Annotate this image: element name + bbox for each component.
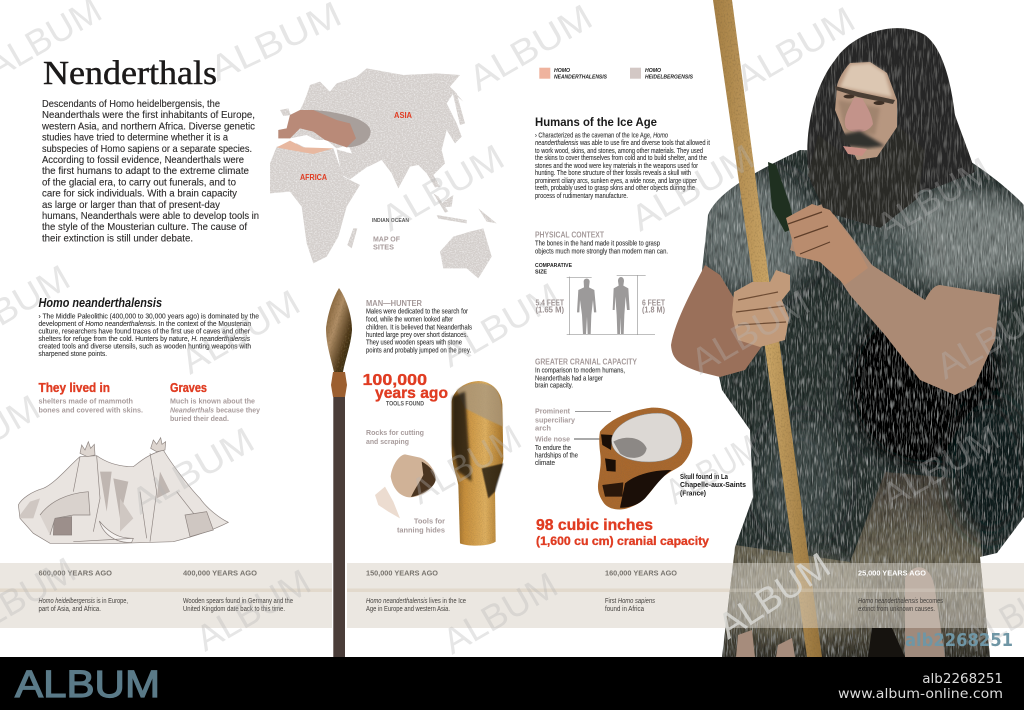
skull callout labels: climate bbox=[535, 460, 555, 467]
watermarks: ALBUM bbox=[868, 149, 997, 247]
size comparison chart: SIZE bbox=[535, 270, 547, 276]
watermarks: ALBUM bbox=[124, 419, 261, 522]
size comparison chart: (1.65 M) bbox=[536, 306, 564, 314]
watermarks: ALBUM bbox=[462, 0, 599, 99]
callout: graves: Neanderthals because they bbox=[170, 406, 261, 414]
timeline: 150,000 years ago: Homo neanderthalensis lives in the Ice bbox=[366, 598, 466, 605]
text: Middle Paleolithic: › The Middle Paleolithic (400,000 to 30,000 years ago) is dominated by the bbox=[38, 314, 259, 320]
skull callout labels: Wide nose bbox=[535, 434, 570, 444]
legend: HOMO bbox=[645, 68, 662, 74]
watermarks: ALBUM bbox=[174, 281, 307, 382]
watermarks: ALBUM bbox=[404, 416, 528, 512]
face bbox=[835, 62, 897, 160]
text: man hunter: Males were dedicated to the search for bbox=[366, 308, 469, 316]
figure: Neanderthal man with spear bbox=[671, 0, 1024, 660]
text: Middle Paleolithic bbox=[38, 314, 259, 358]
text: greater cranial capacity: GREATER CRANIAL CAPACITY bbox=[535, 358, 638, 366]
text: ice age bbox=[535, 132, 710, 200]
timeline: 25,000 years ago: extinct from unknown causes. bbox=[858, 606, 935, 613]
skull caption bbox=[680, 474, 746, 498]
watermarks: ALBUM bbox=[624, 136, 761, 239]
label: tanning tools bbox=[397, 516, 445, 534]
intro text block: humans, Neanderthals were able to develop tools in bbox=[42, 211, 259, 222]
watermarks: ALBUM bbox=[434, 274, 567, 375]
text: greater cranial capacity: brain capacity. bbox=[535, 382, 573, 390]
fur cape and skirt bbox=[695, 145, 1024, 660]
text: ice age: process of rudimentary manufacture. bbox=[535, 193, 628, 200]
skull callout labels: hardships of the bbox=[535, 452, 578, 460]
heading: humans of the ice age: Humans of the Ice Age bbox=[535, 115, 657, 129]
illustration: mammoth bone shelter bbox=[18, 438, 228, 543]
skull callout labels: superciliary bbox=[535, 416, 576, 424]
watermarks: ALBUM bbox=[684, 281, 817, 382]
text: ice age: stones and the wood were key materials in the weapons used for bbox=[535, 163, 699, 170]
timeline: 25,000 years ago: 25,000 YEARS AGO bbox=[858, 568, 926, 578]
intro text block: of the glacial era, to carry out funerals, and to bbox=[42, 177, 236, 188]
hair bbox=[807, 28, 975, 190]
watermarks: ALBUM bbox=[658, 426, 766, 512]
footer logo: ALBUM bbox=[15, 664, 160, 706]
brain cast bbox=[612, 413, 682, 462]
text: physical context: The bones in the hand made it possible to grasp bbox=[535, 240, 660, 248]
timeline: 150,000 years ago: Age in Europe and western Asia. bbox=[366, 606, 450, 613]
figure: neanderthal bbox=[577, 279, 596, 334]
legs bbox=[736, 567, 945, 657]
intro text block: care for sick individuals. With a brain capacity bbox=[42, 189, 238, 200]
stone rock tool bbox=[375, 454, 436, 518]
callout: 100,000 years ago: 100,000 bbox=[362, 372, 427, 389]
continents bbox=[270, 68, 497, 278]
right arm bbox=[790, 203, 1000, 395]
intro text block: Neanderthals were the first inhabitants of Europe, bbox=[42, 110, 255, 121]
text: man hunter: food, while the women looked after bbox=[366, 316, 454, 324]
label: tanning tools: tanning hides bbox=[397, 526, 445, 534]
timeline: 160,000 years ago: First Homo sapiens bbox=[605, 598, 655, 605]
text: Middle Paleolithic: culture, researchers have found traces of the first use of caves and other bbox=[38, 328, 251, 336]
size comparison chart: 5.4 FEET bbox=[536, 298, 564, 308]
skull callout labels: To endure the bbox=[535, 445, 571, 452]
callout: graves: Much is known about the bbox=[170, 396, 255, 406]
footer bar bbox=[0, 657, 1024, 710]
text: Middle Paleolithic: development of Homo neanderthalensis. In the context of the Mousterian bbox=[38, 321, 251, 328]
callout: they lived in: shelters made of mammoth bbox=[38, 396, 133, 406]
spear shaft bbox=[333, 395, 345, 657]
intro text block: studies have tried to determine whether it is a bbox=[42, 133, 228, 144]
watermarks: ALBUM bbox=[436, 564, 564, 662]
text: ice age: hunting. The bone structure of their fossils reveals a skull with bbox=[535, 170, 691, 177]
callout: 98 cubic inches: (1,600 cu cm) cranial capacity bbox=[536, 534, 709, 548]
timeline: 600,000 years ago: part of Asia, and Africa. bbox=[38, 606, 101, 613]
intro text block: western Asia, and northern Africa. Diverse genetic bbox=[41, 121, 255, 132]
stone tool in hand bbox=[768, 162, 795, 232]
stone spear point bbox=[326, 288, 352, 372]
timeline: 400,000 years ago: Wooden spears found in Germany and the bbox=[183, 598, 293, 605]
timeline: 160,000 years ago: 160,000 YEARS AGO bbox=[605, 568, 677, 578]
timeline: 400,000 years ago: United Kingdom date back to this time. bbox=[183, 606, 285, 613]
size comparison chart bbox=[535, 263, 665, 335]
skull caption: Chapelle-aux-Saints bbox=[680, 482, 746, 489]
label: rocks bbox=[366, 428, 424, 446]
footer url: www.album-online.com bbox=[838, 686, 1003, 702]
watermarks: ALBUM bbox=[728, 0, 862, 99]
size comparison chart: COMPARATIVE bbox=[535, 263, 572, 269]
callout: graves bbox=[170, 380, 261, 423]
timeline: 600,000 years ago: Homo heidelbergensis is in Europe, bbox=[38, 598, 128, 605]
timeline: 600,000 years ago bbox=[38, 568, 128, 613]
callout: graves: buried their dead. bbox=[170, 414, 229, 423]
text: physical context: PHYSICAL CONTEXT bbox=[535, 230, 604, 240]
text: man hunter: points and probably jumped on the prey. bbox=[366, 348, 471, 354]
map of sites: SITES bbox=[373, 242, 394, 252]
text: Middle Paleolithic: sharpened stone points. bbox=[38, 351, 107, 358]
watermarks: ALBUM bbox=[203, 0, 347, 89]
size comparison chart: 6 FEET bbox=[642, 298, 665, 308]
timeline: 160,000 years ago: found in Africa bbox=[605, 606, 644, 613]
swatch: heidelbergensis bbox=[630, 68, 641, 79]
skull caption: (France) bbox=[680, 490, 706, 498]
heading: Homo neanderthalensis: Homo neanderthalensis bbox=[38, 296, 162, 310]
intro text block bbox=[41, 99, 259, 244]
timeline: 600,000 years ago: 600,000 YEARS AGO bbox=[38, 568, 112, 578]
spear illustration bbox=[326, 288, 352, 657]
size comparison chart: (1.8 M) bbox=[642, 306, 665, 314]
label: rocks: Rocks for cutting bbox=[366, 428, 424, 437]
map labels: ASIA bbox=[394, 111, 412, 120]
callout: 100,000 years ago: years ago bbox=[375, 385, 448, 402]
stone hand tool bbox=[452, 381, 503, 546]
callout: graves: Graves bbox=[170, 380, 207, 395]
text: man hunter: MAN—HUNTER bbox=[366, 299, 422, 308]
callout: 98 cubic inches: 98 cubic inches bbox=[536, 517, 653, 534]
text: ice age: prominent ciliary arcs, sunken eyes, a wide nose, and large upper bbox=[535, 178, 698, 185]
text: man hunter: hunted large prey over short distances. bbox=[366, 332, 468, 339]
legend bbox=[539, 68, 693, 81]
map of sites: AFRICA bbox=[300, 173, 327, 182]
legend: HOMO bbox=[554, 68, 571, 74]
callout: they lived in: They lived in bbox=[38, 380, 110, 395]
timeline: 400,000 years ago bbox=[183, 568, 293, 613]
map of sites: MAP OF bbox=[373, 234, 400, 244]
hand holding tool bbox=[786, 204, 868, 285]
title: Nenderthals bbox=[43, 55, 217, 92]
text: ice age: teeth, probably used to grasp skins and other objects during the bbox=[535, 185, 695, 192]
watermarks: ALBUM bbox=[374, 136, 511, 239]
text: man hunter: children. It is believed that Neanderthals bbox=[366, 324, 472, 332]
skull caption: Skull found in La bbox=[680, 474, 728, 481]
text: ice age: neanderthalensis was able to use fire and diverse tools that allowed it bbox=[535, 140, 710, 147]
label: tanning tools: Tools for bbox=[414, 516, 445, 526]
intro text block: Descendants of Homo heidelbergensis, the bbox=[42, 99, 220, 110]
timeline: 25,000 years ago: Homo neanderthalensis becomes bbox=[858, 598, 943, 605]
callout: 100,000 years ago: TOOLS FOUND bbox=[386, 400, 424, 408]
text: ice age: the skins to cover themselves from cold and to build shelter, and the bbox=[535, 155, 707, 162]
callout: 98 cubic inches bbox=[536, 517, 709, 548]
watermarks: ALBUM bbox=[188, 561, 317, 659]
intro text block: as large or larger than that of present-day bbox=[42, 200, 221, 211]
timeline: 150,000 years ago bbox=[366, 568, 466, 613]
text: greater cranial capacity: Neanderthals had a larger bbox=[535, 376, 604, 382]
translucent timeline overlay on figure bbox=[726, 563, 987, 628]
skull callout labels: Prominent bbox=[535, 406, 571, 416]
text: ice age: to work wood, skins, and stones, among other materials. They used bbox=[535, 148, 703, 155]
swatch: neanderthalensis bbox=[539, 68, 550, 79]
hand holding spear bbox=[732, 270, 790, 347]
callout: they lived in: bones and covered with skins. bbox=[38, 406, 143, 414]
intro text block: the first humans to adapt to the extreme climate bbox=[42, 166, 249, 177]
text: man hunter bbox=[366, 299, 472, 354]
skull callout labels bbox=[535, 406, 611, 467]
text: physical context bbox=[535, 230, 668, 256]
text: greater cranial capacity: In comparison to modern humans, bbox=[535, 368, 625, 374]
skull bbox=[598, 408, 692, 510]
skull callout labels: arch bbox=[535, 424, 551, 432]
left arm bbox=[671, 265, 770, 377]
text: man hunter: They used wooden spears with stone bbox=[366, 340, 462, 346]
spear binding bbox=[331, 372, 347, 397]
label: rocks: and scraping bbox=[366, 437, 409, 446]
intro text block: According to fossil evidence, Neanderthals were bbox=[42, 155, 244, 166]
text: Middle Paleolithic: created tools and diverse utensils, such as wooden hunting weapons with bbox=[38, 344, 251, 350]
footer id: alb2268251 bbox=[922, 671, 1003, 687]
neanderthal range bbox=[313, 110, 371, 147]
intro text block: their extinction is still under debate. bbox=[42, 233, 193, 244]
timeline: 400,000 years ago: 400,000 YEARS AGO bbox=[183, 568, 257, 578]
watermark on figure: ALBUM bbox=[710, 544, 837, 647]
map of sites: INDIAN OCEAN bbox=[372, 218, 409, 224]
image id overlay: alb2268251 bbox=[905, 630, 1013, 651]
figure: modern human bbox=[613, 277, 630, 334]
text: ice age: › Characterized as the caveman of the Ice Age, Homo bbox=[535, 132, 668, 140]
beard bbox=[808, 125, 925, 228]
text: physical context: objects much more strongly than modern man can. bbox=[535, 248, 668, 256]
watermarks: ALBUM bbox=[874, 416, 1007, 517]
text: greater cranial capacity bbox=[535, 358, 638, 390]
map of sites bbox=[270, 68, 497, 278]
text: Middle Paleolithic: shelters for refuge from the cold. Hunters by nature, H. neanderthalensis bbox=[38, 336, 250, 343]
legend: NEANDERTHALENSIS bbox=[554, 75, 607, 81]
timeline: 160,000 years ago bbox=[605, 568, 677, 613]
timeline: 25,000 years ago bbox=[858, 568, 943, 613]
legend: HEIDELBERGENSIS bbox=[645, 75, 693, 81]
timeline: 150,000 years ago: 150,000 YEARS AGO bbox=[366, 568, 438, 578]
intro text block: subspecies of Homo sapiens or a separate species. bbox=[42, 144, 252, 155]
timeline band bbox=[0, 563, 1024, 628]
spear bbox=[713, 0, 822, 657]
intro text block: the style of the Mousterian culture. The cause of bbox=[42, 222, 247, 233]
callout: they lived in bbox=[38, 380, 143, 414]
callout: 100,000 years ago bbox=[362, 372, 448, 408]
